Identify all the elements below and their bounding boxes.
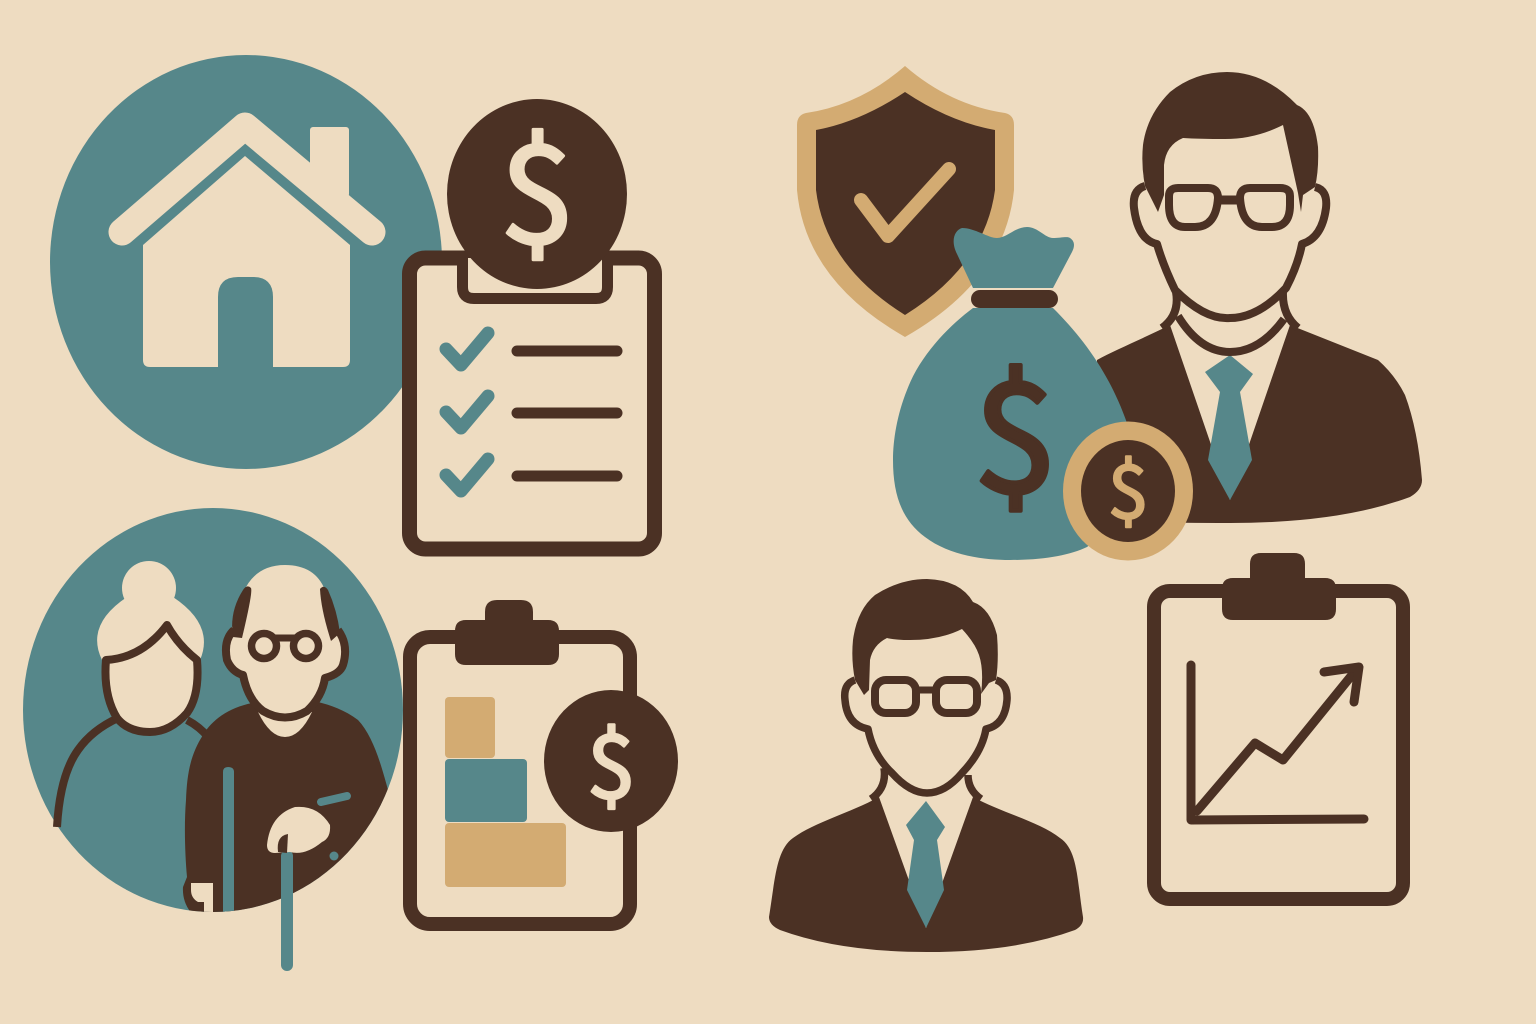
icon: advisor in suit (top) [1097,72,1422,523]
icon: money bag [893,227,1150,560]
icon: shield with check [797,66,1014,337]
icon: advisor in suit (bottom) [769,579,1083,952]
icon: tan dollar coin: $ [1107,433,1149,540]
icon: checklist clipboard with dollar coin: $ [499,86,575,283]
icon: money bag: $ [973,316,1057,536]
icon: budget clipboard with bars and coin [410,600,678,924]
man [183,565,400,965]
woman [57,561,208,827]
icon: checklist clipboard with dollar coin [410,86,654,549]
icon: growth chart clipboard [1154,553,1403,899]
icon: budget clipboard with bars and coin: $ [587,697,635,824]
bar chart [445,697,566,887]
icon: house in teal circle [50,55,442,469]
icon: tan dollar coin [1063,422,1193,560]
icon: elderly couple in teal circle [23,508,403,965]
